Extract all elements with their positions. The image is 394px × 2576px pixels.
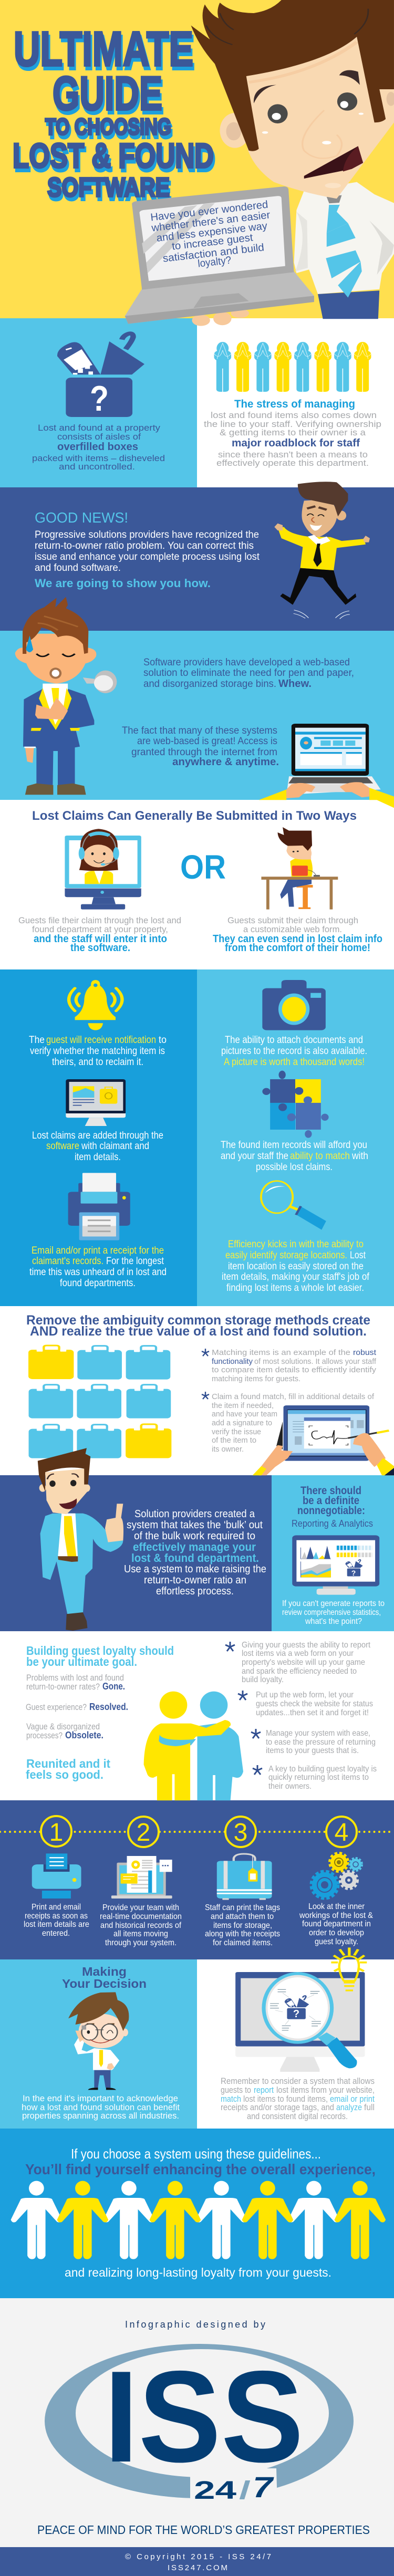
list: claim a found match: Claim a found match, fill in additional details of	[212, 1392, 375, 1401]
heading: lost claims: Lost Claims Can Generally Be Submitted in Two Ways	[32, 809, 357, 823]
logo: ISS 24/7: /	[239, 2477, 251, 2505]
title	[13, 22, 214, 202]
text: anywhere and anytime	[122, 725, 279, 768]
text: web based solution: solution to eliminate the need for pen and paper,	[143, 668, 354, 679]
icon: magnifier over monitor with lightbulb	[235, 1947, 367, 2072]
list: claim a found match: of the item to	[212, 1436, 256, 1445]
text: anywhere and anytime: are web-based is great! Access is	[137, 736, 277, 747]
text: nonnegotiable reporting: Reporting & Analytics	[292, 1518, 373, 1529]
text: building guest loyalty: Vague & disorganized	[26, 1722, 100, 1732]
text: step 3: for claimed items.	[213, 1938, 273, 1947]
timeline: numbered steps: 4	[335, 1819, 348, 1847]
text: step 2: Provide your team with	[102, 1903, 179, 1912]
list: claim a found match: verify the issue	[212, 1427, 261, 1436]
text: remember to consider: analyze	[336, 2102, 362, 2112]
list: loyalty tips: their owners.	[268, 1782, 312, 1791]
list: matching items: robust	[353, 1348, 377, 1357]
text: good news: We are going to show you how.	[35, 577, 211, 590]
list: loyalty tips: build loyalty.	[242, 1675, 284, 1684]
list: matching items: matching items for guests.	[212, 1374, 300, 1383]
text: efficiency: item location is easily stored on the	[228, 1261, 364, 1272]
text: remember to consider: match	[221, 2094, 241, 2104]
text: step 4: guest loyalty.	[315, 1937, 358, 1946]
heading: if you choose: You’ll find yourself enhancing the overall experience,	[25, 2161, 376, 2177]
text: remember to consider	[221, 2076, 375, 2121]
text: nonnegotiable reporting: be a definite	[303, 1495, 359, 1507]
title: ULTIMATE	[14, 22, 193, 76]
list: matching items: to compare item details to efficiently identify	[212, 1365, 377, 1374]
list: matching items	[202, 1348, 377, 1383]
text: building guest loyalty: Resolved.	[89, 1702, 128, 1712]
text: step 3	[205, 1903, 280, 1947]
text: found item records: The found item records will afford you	[221, 1140, 367, 1151]
text: guest files at property: Guests file their claim through the lost and	[18, 915, 181, 925]
text: step 3: Staff can print the tags	[205, 1903, 280, 1912]
icon: step 1 printer	[32, 1853, 81, 1899]
text: web based solution: Software providers have developed a web-based	[143, 657, 350, 668]
text: guest files at property	[18, 915, 181, 954]
timeline: numbered steps: 1	[49, 1819, 63, 1847]
text: remember to consider: report	[254, 2085, 274, 2095]
text: infographic designed by: Infographic designed by	[125, 2319, 265, 2330]
text: tagline: PEACE OF MIND FOR THE WORLD’S GREATEST PROPERTIES	[37, 2523, 370, 2537]
icon: row of stressed staff	[214, 342, 371, 392]
text: attach documents: A picture is worth a thousand words!	[224, 1057, 365, 1068]
heading: if you choose: If you choose a system using these guidelines...	[71, 2146, 321, 2162]
icon: reports monitor	[292, 1535, 379, 1595]
list: loyalty tips: property's website will up your game	[242, 1658, 365, 1667]
icon: step 2 laptop with documents	[111, 1856, 172, 1899]
icon: row of guests holding hands	[11, 2181, 386, 2259]
list: loyalty tips	[225, 1641, 377, 1791]
text: guest notification: to	[159, 1035, 167, 1046]
heading: remove the ambiguity	[26, 1313, 370, 1339]
text: nonnegotiable reporting: nonnegotiable:	[297, 1505, 365, 1517]
icon: desktop monitor with software	[66, 1079, 126, 1126]
text: step 1: receipts as soon as	[25, 1912, 88, 1921]
title: GUIDE	[53, 67, 162, 120]
character: relieved man with sweat drop	[15, 597, 117, 795]
text: OR: OR	[180, 848, 226, 886]
text: the stress of managing	[204, 398, 381, 468]
text: in the end: how a lost and found solution can benefit	[22, 2102, 180, 2112]
icon: camera	[262, 980, 326, 1030]
text: overfilled boxes	[32, 423, 165, 472]
icon: lost phone and umbrella in box: ?	[90, 379, 109, 419]
logo: ISS 24/7: 24	[194, 2477, 236, 2505]
character: jumping businessman	[274, 482, 370, 619]
text: lost claims software: with claimant and	[81, 1141, 149, 1152]
list: claim a found match: add a signature to	[212, 1419, 272, 1427]
text: email or print receipt: time this was unheard of in lost and	[29, 1267, 167, 1278]
heading: making your decision	[62, 1965, 147, 1990]
icon: laptop with typing hands	[259, 724, 394, 808]
text: email or print receipt: found departments.	[60, 1278, 136, 1289]
list: matching items: Matching items is an example of the	[212, 1348, 350, 1357]
footer: ISS247.COM	[168, 2563, 227, 2572]
text: guest submits web form: Guests submit their claim through	[227, 915, 358, 925]
list: loyalty tips: and spark the efficiency needed to	[242, 1667, 357, 1676]
text: step 1	[24, 1903, 89, 1938]
heading: remove the ambiguity: AND realize the true value of a lost and found solution.	[30, 1324, 367, 1339]
text: in the end	[22, 2093, 180, 2121]
text: step 2: through your system.	[105, 1938, 177, 1947]
icon: magnifying glass	[261, 1181, 326, 1230]
heading: remove the ambiguity: Remove the ambiguity common storage methods create	[26, 1313, 370, 1328]
list: loyalty tips: Giving your guests the ability to report	[242, 1641, 371, 1650]
character: thumbs-up businessman	[38, 1448, 123, 1631]
text: email or print receipt: claimant's records.	[32, 1256, 103, 1267]
list: claim a found match: its owner.	[212, 1445, 244, 1454]
list: loyalty tips: items to your guests that is.	[266, 1746, 359, 1755]
text: remember to consider: guests to	[221, 2085, 251, 2095]
timeline: numbered steps	[0, 1816, 394, 1847]
text: overfilled boxes: Lost and found at a property	[38, 423, 161, 433]
text: step 2: and historical records of	[100, 1921, 182, 1930]
list: claim a found match: the item if needed,	[212, 1401, 274, 1410]
icon: tablet signature	[253, 1405, 394, 1475]
text: the stress of managing: major roadblock for staff	[232, 437, 360, 449]
text: email or print receipt	[29, 1245, 167, 1289]
text: lost claims software	[32, 1130, 163, 1163]
text: web based solution	[143, 657, 354, 690]
text: found item records: ability to match	[290, 1151, 350, 1162]
text: building guest loyalty: return-to-owner rates?	[26, 1682, 100, 1692]
text: guest notification	[29, 1035, 167, 1068]
text: solution providers: system that takes the ‘bulk’ out	[127, 1519, 263, 1531]
text: overfilled boxes: overfilled boxes	[57, 441, 138, 453]
list: matching items: functionality	[212, 1357, 253, 1366]
text: overfilled boxes: and uncontrolled.	[59, 462, 135, 472]
text: efficiency: Efficiency kicks in with the ability to	[228, 1239, 364, 1250]
text: step 2: real-time documentation	[100, 1912, 182, 1921]
text: solution providers: effectively manage your	[133, 1540, 256, 1553]
icon: notification bell	[69, 980, 122, 1030]
text: lost claims software: Lost claims are added through the	[32, 1130, 163, 1141]
text: the stress of managing: & getting items to their owner is a	[220, 427, 366, 437]
text: the stress of managing: since there hasn't been a means to	[218, 450, 368, 460]
icon: step 3 tagged suitcase	[217, 1854, 272, 1900]
heading: making your decision: Making	[82, 1965, 127, 1978]
text: building guest loyalty	[26, 1644, 174, 1781]
list: loyalty tips: quickly returning lost items to	[268, 1773, 369, 1782]
list: loyalty tips: lost items via a web form on your	[242, 1649, 354, 1658]
text: good news: GOOD NEWS!	[35, 509, 128, 526]
text: guest submits web form	[213, 915, 382, 954]
list: claim a found match: and have your team	[212, 1410, 277, 1419]
text: guest notification: theirs, and to reclaim it.	[52, 1057, 143, 1068]
icon: two friends embracing	[144, 1692, 243, 1800]
list: matching items: of most solutions. It allows your staff	[254, 1357, 377, 1366]
text: building guest loyalty: feels so good.	[26, 1768, 103, 1781]
text: step 2	[100, 1903, 182, 1947]
text: anywhere and anytime: granted through the internet from	[131, 747, 277, 758]
text: remember to consider: email or print	[330, 2094, 375, 2104]
laptop screen question: Have you ever wondered	[150, 199, 268, 224]
text: efficiency: Lost	[350, 1250, 366, 1261]
text: guest files at property: the software.	[70, 942, 130, 954]
text: solution providers: effortless process.	[156, 1586, 234, 1597]
timeline: numbered steps: 3	[234, 1819, 247, 1847]
text: building guest loyalty: Building guest loyalty should	[26, 1644, 174, 1657]
footer: © Copyright 2015 - ISS 24/7	[125, 2552, 271, 2561]
title: LOST & FOUND	[13, 136, 214, 175]
text: solution providers: Solution providers created a	[134, 1508, 255, 1520]
list: loyalty tips: to ease the pressure of returning	[266, 1738, 376, 1747]
logo: ISS 24/7	[45, 2343, 354, 2505]
text: step 4: found department in	[302, 1920, 371, 1928]
logo: ISS 24/7: 7	[253, 2470, 274, 2504]
text: step 2: all items moving	[113, 1930, 168, 1938]
text: mini question mark and reports note	[282, 1569, 385, 1626]
text: guest files at property: found department at your property,	[32, 924, 168, 934]
laptop screen question: satisfaction and build	[162, 242, 265, 265]
hero character with laptop	[125, 0, 394, 326]
text: lost claims software: item details.	[75, 1152, 121, 1163]
text: found item records: possible lost claims.	[256, 1162, 333, 1173]
text: solution providers: of the bulk work required to	[134, 1530, 255, 1542]
text: step 3: and attach them to	[211, 1912, 274, 1921]
list: loyalty tips: guests check the website for status	[256, 1699, 373, 1708]
text: the stress of managing: effectively operate this department.	[216, 458, 369, 468]
laptop screen question: loyalty?	[197, 255, 232, 270]
text: building guest loyalty: processes?	[26, 1730, 63, 1740]
text: efficiency: finding lost items a whole lot easier.	[226, 1282, 364, 1294]
text: building guest loyalty: Obsolete.	[65, 1730, 103, 1740]
text: the stress of managing: The stress of managing	[234, 398, 355, 410]
text: overfilled boxes: consists of aisles of	[57, 432, 141, 442]
icon: step 4 gears	[312, 1853, 362, 1898]
text: web based solution: Whew.	[278, 678, 312, 690]
title: TO CHOOSING	[45, 114, 171, 140]
text: attach documents: pictures to the record is also available.	[221, 1046, 367, 1057]
text: remember to consider: and consistent digital records.	[247, 2111, 348, 2121]
text: email or print receipt: For the longest	[106, 1256, 164, 1267]
icon: operator in computer monitor	[65, 829, 141, 910]
text: web based solution: and disorganized storage bins.	[143, 679, 276, 690]
text: email or print receipt: Email and/or print a receipt for the	[32, 1245, 164, 1256]
text: remember to consider: receipts and/or storage tags, and	[221, 2102, 334, 2112]
laptop screen question: whether there's an easier	[150, 209, 271, 234]
text: overfilled boxes: packed with items – disheveled	[32, 453, 165, 463]
text: step 1: Print and email	[32, 1903, 81, 1912]
text: in the end: properties spanning across all industries.	[22, 2111, 179, 2121]
icon: printer	[68, 1173, 130, 1240]
text: building guest loyalty: Problems with lost and found	[26, 1673, 124, 1683]
laptop screen question	[150, 199, 271, 270]
text: step 4	[299, 1902, 373, 1946]
icon: lost phone and umbrella in box	[57, 333, 144, 419]
text: found item records: and your staff the	[221, 1151, 288, 1162]
text: guest notification: guest will receive notification	[46, 1035, 156, 1046]
footer	[125, 2552, 271, 2572]
text: guest submits web form: from the comfort of their home!	[225, 942, 370, 954]
text: good news: and found software.	[35, 562, 121, 573]
text: lost claims software: software	[46, 1141, 79, 1152]
text: remember to consider: full	[364, 2102, 375, 2112]
text: remember to consider: Remember to consider a system that allows	[221, 2076, 375, 2086]
text: building guest loyalty: Guest experience?	[26, 1702, 87, 1712]
icon: grid of suitcases	[28, 1346, 171, 1458]
character: man with glasses	[68, 1992, 129, 2090]
text: guest submits web form: They can even send in lost claim info	[213, 933, 382, 945]
text: step 1: lost item details are	[24, 1920, 89, 1929]
text: nonnegotiable reporting: There should	[300, 1485, 361, 1497]
icon: guest with tablet at desk	[261, 827, 338, 910]
text: in the end: In the end it's important to acknowledge	[23, 2093, 178, 2103]
text: efficiency: item details, making your staff's job of	[222, 1271, 370, 1282]
list: loyalty tips: Put up the web form, let your	[256, 1691, 354, 1699]
text: step 4: Look at the inner	[308, 1902, 365, 1911]
text: found item records	[221, 1140, 368, 1173]
text: step 3: items for storage,	[213, 1921, 272, 1930]
text: the stress of managing: the line to your staff. Verifying ownership	[204, 419, 381, 429]
timeline: numbered steps: 2	[137, 1819, 150, 1847]
text: step 3: along with the receipts	[205, 1930, 280, 1938]
text: guest notification: verify whether the matching item is	[30, 1046, 165, 1057]
text: anywhere and anytime: anywhere & anytime.	[172, 756, 279, 768]
text: found item records: with	[351, 1151, 368, 1162]
heading: if you choose	[25, 2146, 376, 2177]
list: loyalty tips: A key to building guest loyalty is	[268, 1765, 377, 1774]
laptop screen question: to increase guest	[171, 232, 254, 253]
text: building guest loyalty: Gone.	[102, 1681, 125, 1692]
text: nonnegotiable reporting	[292, 1485, 373, 1529]
text: guest files at property: and the staff will enter it into	[34, 933, 167, 945]
text: efficiency	[222, 1239, 370, 1294]
text: step 1: entered.	[42, 1929, 70, 1938]
text: good news: Progressive solutions providers have recognized the	[35, 529, 259, 540]
heading: making your decision: Your Decision	[62, 1977, 147, 1990]
text: attach documents	[221, 1035, 367, 1068]
logo: ISS 24/7: ISS	[104, 2343, 304, 2489]
text: the stress of managing: lost and found items also comes down	[211, 410, 377, 420]
text: building guest loyalty: be your ultimate goal.	[26, 1655, 137, 1668]
text: step 4: workings of the lost &	[299, 1911, 373, 1920]
text: mini question mark and reports note: If you can't generate reports to	[282, 1599, 385, 1608]
text: good news	[35, 509, 260, 590]
text: solution providers: Use a system to make raising the	[124, 1563, 266, 1575]
text: mini question mark and reports note: what's the point?	[305, 1617, 362, 1626]
text: solution providers: lost & found department.	[131, 1551, 259, 1565]
text: step 4: order to develop	[309, 1928, 364, 1937]
list: claim a found match	[202, 1392, 375, 1454]
text: anywhere and anytime: The fact that many of these systems	[122, 725, 277, 736]
text: long lasting loyalty: and realizing long-lasting loyalty from your guests.	[65, 2266, 331, 2279]
text: guest submits web form: a customizable web form.	[243, 924, 342, 934]
text: solution providers: return-to-owner ratio an	[144, 1574, 246, 1586]
text: guest notification: The	[29, 1035, 45, 1046]
title: SOFTWARE	[47, 172, 170, 202]
text: remember to consider: lost items to found items,	[243, 2094, 328, 2104]
text: mini question mark: ?	[293, 2008, 299, 2020]
list: loyalty tips: updates...then set it and forget it!	[256, 1708, 369, 1717]
text: solution providers	[124, 1508, 266, 1597]
text: efficiency: easily identify storage locations.	[225, 1250, 347, 1261]
text: building guest loyalty: Reunited and it	[26, 1757, 110, 1770]
text: remember to consider: lost items from your website,	[276, 2085, 375, 2095]
list: loyalty tips: Manage your system with ease,	[266, 1729, 370, 1738]
text: good news: issue and enhance your complete process using lost	[35, 551, 260, 562]
laptop screen question: and less expensive way	[156, 220, 268, 244]
text: attach documents: The ability to attach documents and	[225, 1035, 363, 1046]
icon: puzzle pieces	[262, 1071, 329, 1138]
text: good news: return-to-owner ratio problem. You can correct this	[35, 540, 254, 551]
text: mini question mark and reports note: ?	[351, 1569, 356, 1577]
